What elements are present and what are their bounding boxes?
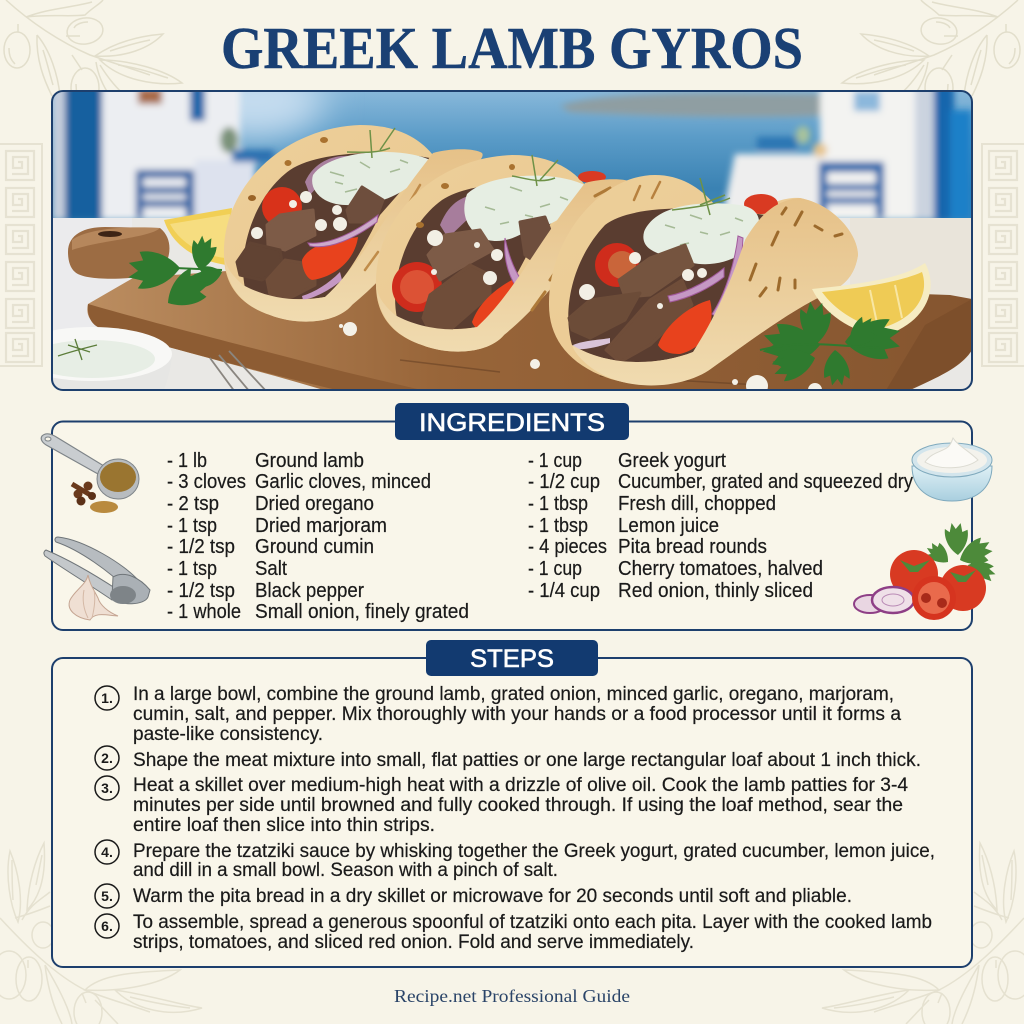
step 1: In a large bowl, combine the ground lamb, grated onion, minced garlic, oregano, marjoram, [133, 684, 894, 705]
fork [210, 351, 267, 392]
panel: hero photo of gyros [51, 90, 973, 391]
panel: steps [52, 640, 972, 967]
ingredients list: left column: Small onion, finely grated [255, 601, 469, 623]
ingredients list: right column: Lemon juice [618, 515, 719, 537]
ingredients list: right column: - 1 cup [528, 450, 582, 472]
ingredients list: left column: - 2 tsp [167, 493, 219, 515]
gyro 1 [224, 125, 483, 322]
decorative greek key border: right [982, 144, 1024, 366]
sauce bowl [53, 327, 172, 389]
step 1 [95, 684, 901, 745]
step 3: Heat a skillet over medium-high heat with a drizzle of olive oil. Cook the lamb patties for 3-4 [133, 775, 908, 796]
ingredients list: right column: - 1 tbsp [528, 515, 588, 537]
ingredients list: right column: Cherry tomatoes, halved [618, 558, 823, 580]
ingredients list: left column: - 1/2 tsp [167, 580, 235, 602]
step 6 [95, 912, 932, 953]
decorative greek key border: left [0, 144, 42, 366]
feta crumbs on board [339, 322, 822, 389]
step 1: paste-like consistency. [133, 724, 323, 745]
ingredients list: left column [167, 450, 469, 623]
ingredients list: right column: Fresh dill, chopped [618, 493, 776, 515]
ingredients list: left column: Black pepper [255, 580, 364, 602]
ingredients list: left column: - 1 whole [167, 601, 241, 623]
step 3: minutes per side until browned and fully cooked through. If using the loaf method, sear the [133, 795, 903, 816]
step 4 [95, 840, 935, 881]
step 6: 6. [101, 918, 113, 934]
step 6: strips, tomatoes, and sliced red onion. Fold and serve immediately. [133, 932, 694, 953]
decorative olive branch: top-left [4, 0, 182, 108]
ingredients list: left column: - 1/2 tsp [167, 536, 235, 558]
step 4: Prepare the tzatziki sauce by whisking together the Greek yogurt, grated cucumber, lemon juice, [133, 841, 935, 862]
ingredients list: left column: - 3 cloves [167, 471, 246, 493]
step 1: cumin, salt, and pepper. Mix thoroughly with your hands or a food processor until it forms a [133, 704, 901, 725]
step 2: 2. [101, 750, 113, 766]
panel: ingredients [41, 403, 998, 630]
icon: garlic press with garlic [44, 537, 150, 620]
ingredients list: left column: Ground lamb [255, 450, 364, 472]
ingredients heading: INGREDIENTS [419, 409, 605, 437]
step 5: 5. [101, 888, 113, 904]
icon: tomatoes, onion and parsley [854, 522, 998, 620]
ingredients list: left column: Garlic cloves, minced [255, 471, 431, 493]
step 2: Shape the meat mixture into small, flat patties or one large rectangular loaf about 1 inch thick. [133, 750, 921, 771]
decorative olive branch: top-right [842, 0, 1020, 108]
lemon wedge left [164, 208, 232, 265]
ingredients list: right column: - 1/2 cup [528, 471, 600, 493]
ingredients list: right column: - 4 pieces [528, 536, 607, 558]
ingredients list: left column: - 1 tsp [167, 515, 217, 537]
photo background: seaside taverna [53, 92, 971, 389]
title: GREEK LAMB GYROS [221, 15, 803, 81]
ingredients list: right column: Pita bread rounds [618, 536, 767, 558]
lemon wedge right [812, 263, 931, 337]
ingredients list: left column: Salt [255, 558, 287, 580]
step 3: entire loaf then slice into thin strips. [133, 815, 435, 836]
step 6: To assemble, spread a generous spoonful of tzatziki onto each pita. Layer with the cooked lamb [133, 912, 932, 933]
parsley left [128, 236, 222, 306]
ingredients list: right column: Red onion, thinly sliced [618, 580, 813, 602]
cutting board [68, 227, 972, 395]
icon: measuring spoon with spices [41, 434, 139, 513]
step 3 [95, 775, 908, 836]
ingredients list: left column: Dried oregano [255, 493, 374, 515]
ingredients list: right column: - 1 cup [528, 558, 582, 580]
steps heading: STEPS [470, 645, 554, 673]
ingredients list: left column: Ground cumin [255, 536, 374, 558]
ingredients list: left column: Dried marjoram [255, 515, 387, 537]
step 4: 4. [101, 844, 113, 860]
gyro 2 [376, 155, 635, 352]
parsley right [760, 302, 902, 387]
ingredients list: right column: Greek yogurt [618, 450, 726, 472]
ingredients list: left column: - 1 tsp [167, 558, 217, 580]
step 4: and dill in a small bowl. Season with a pinch of salt. [133, 860, 558, 881]
ingredients list: right column: Cucumber, grated and squeezed dry [618, 471, 913, 493]
decorative olive branch: bottom-right [822, 843, 1024, 1024]
ingredients list: left column: - 1 lb [167, 450, 207, 472]
ingredients list: right column: - 1/4 cup [528, 580, 600, 602]
step 3: 3. [101, 780, 113, 796]
decorative olive branch: bottom-left [0, 843, 202, 1024]
step 5: Warm the pita bread in a dry skillet or microwave for 20 seconds until soft and pliable. [133, 886, 852, 907]
ingredients list: right column: - 1 tbsp [528, 493, 588, 515]
ingredients heading [395, 403, 629, 440]
footer: Recipe.net Professional Guide [394, 986, 630, 1006]
ingredients list: right column [528, 450, 913, 602]
icon: bowl of greek yogurt [912, 438, 992, 501]
gyro 3 [549, 175, 858, 385]
step 1: 1. [101, 690, 113, 706]
steps heading [426, 640, 598, 676]
